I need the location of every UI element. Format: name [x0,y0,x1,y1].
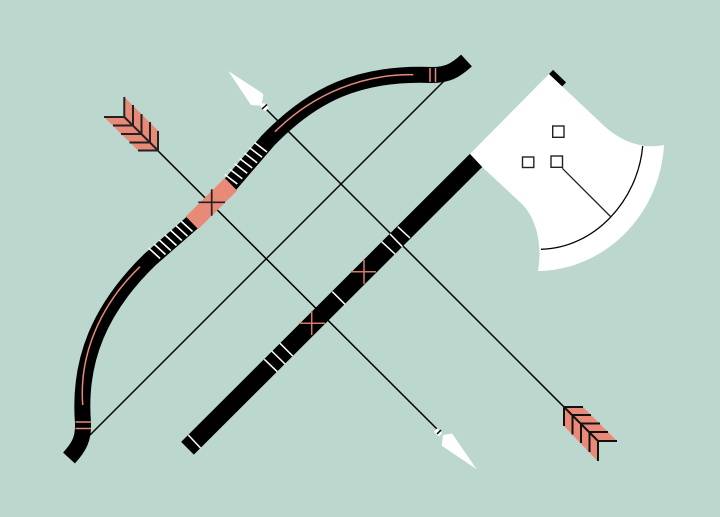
axe blade [470,74,664,271]
icon: arrow head lower right [434,428,477,469]
axe handle [188,160,476,448]
blade radial line [562,168,611,217]
handle stripes [188,227,410,448]
blade inner arc [541,146,643,249]
lower limb stripes [149,221,192,258]
handle crosses [299,260,376,335]
bow inlay lines [82,75,413,405]
axe [188,72,664,448]
icon: fletching lower right [564,407,617,461]
arrow: shaft from upper left head to lower right fletching [228,71,598,441]
bow limbs [69,60,466,458]
bowstring [88,80,444,436]
bow tip ticks [76,68,436,428]
bow [69,60,466,458]
grip cross [198,189,225,216]
handle top cap [551,72,564,84]
icon: arrow head upper left [228,71,269,111]
upper limb stripes [225,142,267,184]
icon: fletching upper left [104,97,158,150]
bow grip wrap [192,184,231,223]
blade squares [522,126,564,168]
arrow: shaft from upper left to lower right [124,117,477,469]
